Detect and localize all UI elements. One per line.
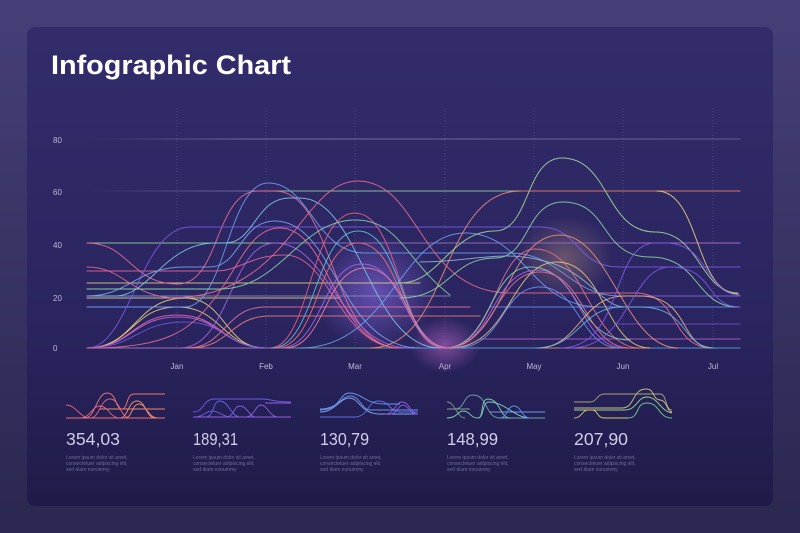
value: 148,99 <box>447 429 498 449</box>
x axis month labels <box>171 362 718 371</box>
series: June and July peaks <box>535 243 740 348</box>
value: 130,79 <box>320 429 369 449</box>
description: sed diam nonummy <box>574 467 618 473</box>
description: sed diam nonummy <box>193 467 237 473</box>
x axis month labels: Jun <box>617 362 629 371</box>
description: consectetuer adipiscing elit, <box>193 461 254 467</box>
x axis month labels: May <box>526 362 542 371</box>
description: Lorem ipsum dolor sit amet, <box>574 455 636 461</box>
mini chart: coral lines <box>66 393 165 418</box>
panel: metric 354,03 <box>66 393 165 473</box>
description: Lorem ipsum dolor sit amet, <box>320 455 382 461</box>
chart glows <box>313 216 613 373</box>
line chart: monthly series <box>87 139 740 348</box>
y axis labels: 60 <box>53 188 62 197</box>
x axis month labels: Mar <box>348 362 362 371</box>
description: consectetuer adipiscing elit, <box>66 461 127 467</box>
panel: metric 148,99 <box>447 395 545 473</box>
mini chart: blue lines <box>320 393 418 417</box>
y axis labels: 80 <box>53 136 62 145</box>
panel: metric 189,31 <box>193 399 291 473</box>
x axis month labels: Feb <box>259 362 273 371</box>
description: sed diam nonummy <box>447 467 491 473</box>
description: consectetuer adipiscing elit, <box>447 461 508 467</box>
description: consectetuer adipiscing elit, <box>320 461 381 467</box>
value: 354,03 <box>66 429 120 449</box>
x axis month labels: Jul <box>708 362 718 371</box>
panel: metric 130,79 <box>320 393 418 473</box>
y axis labels: 40 <box>53 241 62 250</box>
panel: metric 207,90 <box>574 389 672 473</box>
series: March peaks <box>87 181 712 348</box>
description: Lorem ipsum dolor sit amet, <box>193 455 255 461</box>
value: 189,31 <box>193 429 238 449</box>
y axis labels: 0 <box>53 344 58 353</box>
description: consectetuer adipiscing elit, <box>574 461 635 467</box>
mini chart: green and blue lines <box>447 395 545 418</box>
x axis month labels: Jan <box>171 362 183 371</box>
mini chart: gold and green lines <box>574 389 672 418</box>
description: sed diam nonummy <box>66 467 110 473</box>
description: Lorem ipsum dolor sit amet, <box>66 455 128 461</box>
description: sed diam nonummy <box>320 467 364 473</box>
y axis labels: 20 <box>53 294 62 303</box>
y axis labels <box>53 136 62 353</box>
series: May peaks <box>370 158 738 348</box>
series: January bumps <box>87 298 268 348</box>
mini chart: violet lines <box>193 399 291 417</box>
description: Lorem ipsum dolor sit amet, <box>447 455 509 461</box>
series: February peaks <box>87 183 740 348</box>
x axis month labels: Apr <box>439 362 452 371</box>
title: Infographic Chart <box>51 50 291 80</box>
series: horizontal baselines <box>87 191 740 348</box>
value: 207,90 <box>574 429 628 449</box>
